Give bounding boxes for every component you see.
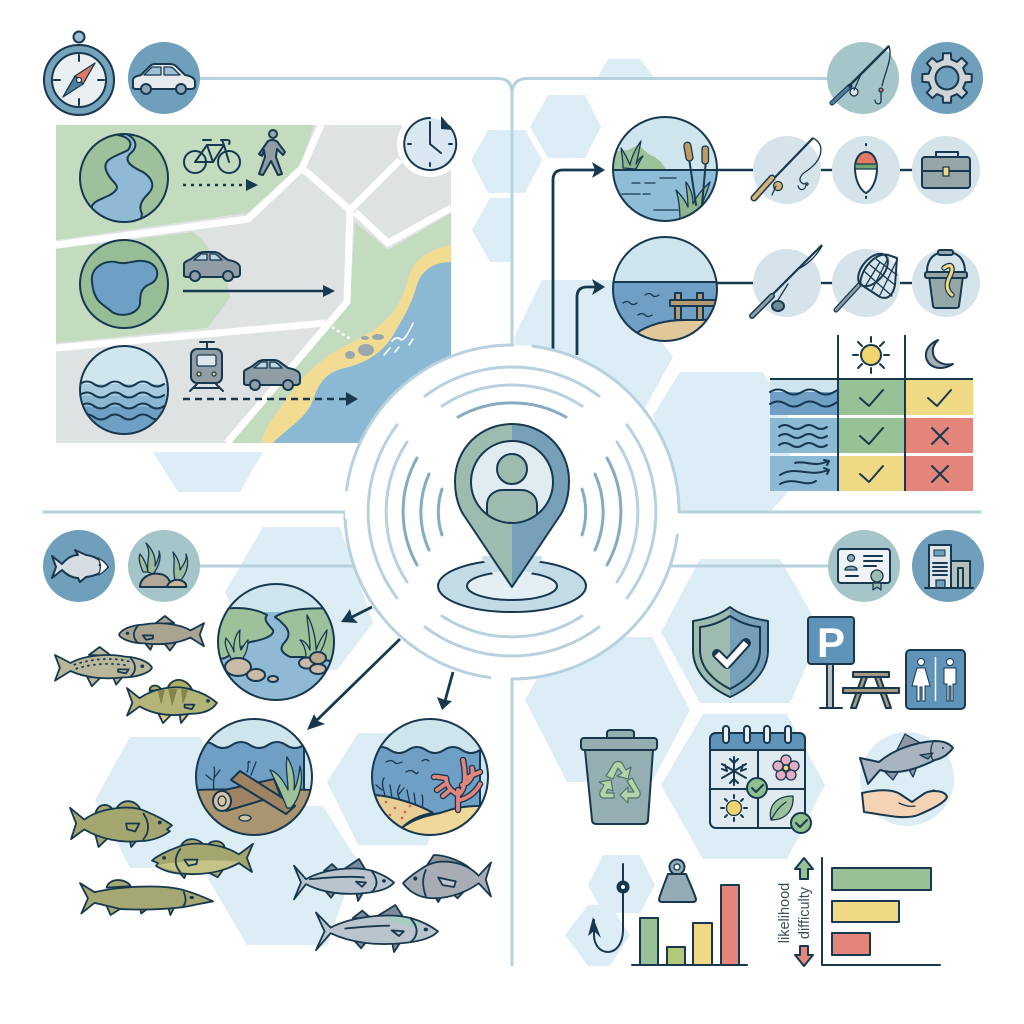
axis labels: likelihood and difficulty: likelihood xyxy=(777,883,793,943)
signal arcs xyxy=(368,367,656,656)
panel: travel map xyxy=(56,125,451,443)
icon: fish badge xyxy=(43,530,115,602)
map roads xyxy=(56,125,451,443)
water ripples xyxy=(384,323,413,355)
axis labels: likelihood and difficulty xyxy=(777,858,813,966)
icon: recycling bin xyxy=(581,730,657,824)
icon: casting rod xyxy=(752,245,822,317)
icon: fishing hook xyxy=(588,864,630,952)
recycling symbol xyxy=(599,762,640,803)
icon: fishing license badge xyxy=(828,530,900,602)
icon: catch and release xyxy=(860,732,954,826)
shore rocks xyxy=(345,334,384,359)
hub disc xyxy=(345,345,679,679)
pin base ripple xyxy=(438,558,586,612)
arrow: to lake shore xyxy=(553,162,605,349)
icon: bait bucket xyxy=(912,249,980,317)
conditions table xyxy=(770,335,973,491)
inner signal arcs xyxy=(403,403,621,565)
icon: gear badge xyxy=(911,42,983,114)
fish: speckled trout xyxy=(55,647,152,686)
icon: restroom sign xyxy=(906,650,965,709)
fish: sea bream xyxy=(403,855,491,902)
central location hub xyxy=(345,345,679,679)
coral reef habitat circle xyxy=(372,719,490,840)
icon: car xyxy=(184,252,240,281)
icon: car badge xyxy=(128,42,200,114)
fish: yellow perch xyxy=(127,680,217,723)
table grid xyxy=(770,335,973,491)
arrow: car route xyxy=(183,285,335,297)
icon: landing net xyxy=(832,248,900,317)
lake destination circle xyxy=(80,240,168,328)
map sand shore xyxy=(263,245,451,443)
icon: float bobber xyxy=(832,136,900,204)
outer ring xyxy=(345,345,679,679)
map water xyxy=(273,262,451,443)
river destination circle xyxy=(80,134,168,224)
dotted arrow: walk and bike xyxy=(183,179,258,191)
icon: plants and rocks badge xyxy=(128,530,200,602)
map green zones xyxy=(56,125,451,443)
arrow: to reef xyxy=(437,672,453,710)
connector lines xyxy=(44,78,980,965)
row 2: choppy waves xyxy=(770,418,973,453)
icon: car near train xyxy=(244,360,300,390)
icon: sinker weight xyxy=(659,860,696,902)
snowflake xyxy=(722,757,746,785)
fish: atlantic mackerel xyxy=(316,905,438,952)
icon: compass xyxy=(44,32,114,115)
icon: train xyxy=(190,342,223,391)
walking trail xyxy=(332,327,352,340)
row 3: current xyxy=(770,456,973,491)
gear connector lines xyxy=(717,170,912,283)
map pin xyxy=(455,424,569,587)
icon: walking person xyxy=(259,130,285,175)
flower xyxy=(773,755,799,780)
arrow: to sea pier xyxy=(577,279,605,355)
axis labels: likelihood and difficulty: difficulty xyxy=(797,886,813,939)
sun xyxy=(721,795,747,821)
icon: parking sign xyxy=(808,617,854,708)
sea destination circle xyxy=(80,346,168,437)
fish: brown trout xyxy=(119,616,204,651)
moon header xyxy=(926,340,953,368)
icon: spinning rod xyxy=(753,136,821,204)
arrow: to freshwater structure xyxy=(307,639,400,730)
icon: bicycle xyxy=(184,140,240,173)
arrow: to river xyxy=(341,607,372,623)
bar chart: catch by weight xyxy=(632,885,747,965)
check badges xyxy=(747,778,811,833)
leaf xyxy=(770,796,793,820)
icon: tackle box xyxy=(912,136,980,204)
icon: seasonal calendar xyxy=(710,726,811,833)
dashed arrow: transit route xyxy=(183,392,358,406)
river habitat circle xyxy=(216,584,338,702)
fish: largemouth bass xyxy=(70,801,172,847)
icon: parking sign: P xyxy=(817,619,845,666)
lake shore habitat circle xyxy=(612,117,718,222)
icon: safety shield xyxy=(693,607,768,697)
fish: smallmouth bass xyxy=(152,839,253,878)
arrow down xyxy=(795,946,813,966)
icon: clock xyxy=(397,111,463,177)
pier habitat circle xyxy=(612,237,720,342)
bar chart: likelihood vs difficulty xyxy=(822,858,940,965)
row 1: calm waves xyxy=(770,380,973,415)
icon: buildings badge xyxy=(912,530,984,602)
arrow up xyxy=(795,858,813,879)
log habitat circle xyxy=(196,719,312,836)
icon: picnic table xyxy=(843,672,899,708)
background hexagons xyxy=(95,59,825,966)
sun header xyxy=(853,337,889,373)
fish: northern pike xyxy=(80,880,213,915)
fish: bluefin mackerel xyxy=(294,859,394,901)
icon: fishing rod badge xyxy=(827,42,899,114)
